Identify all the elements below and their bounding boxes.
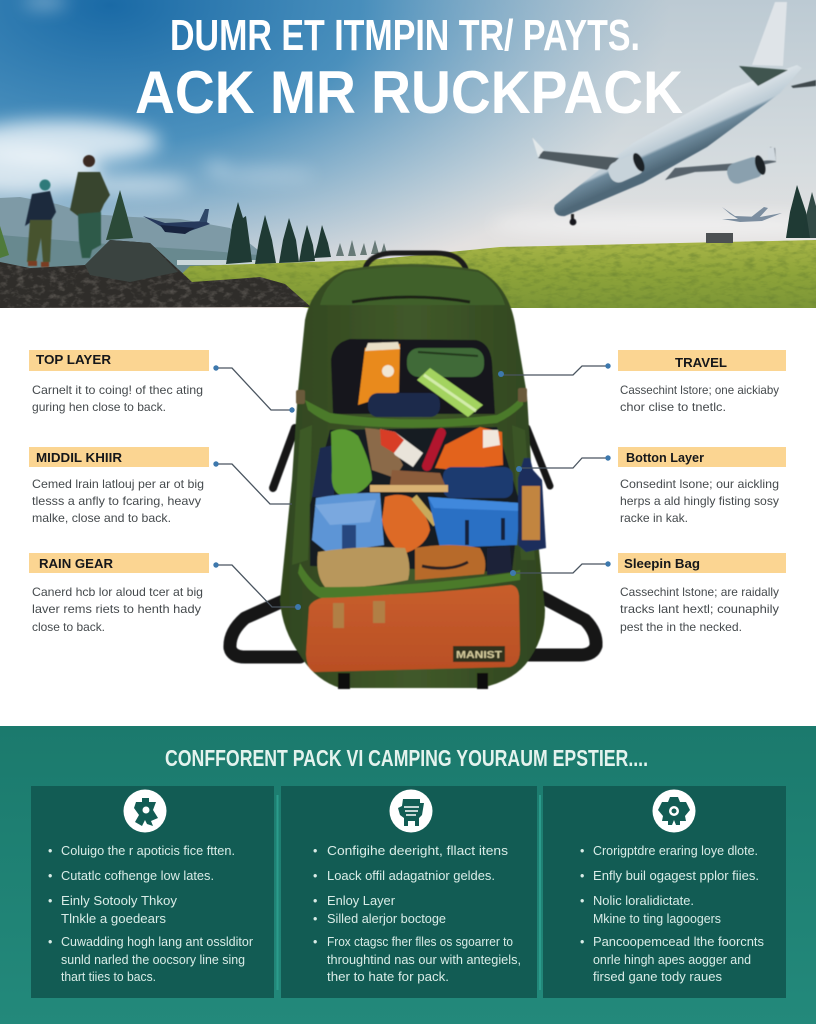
shoulder straps (230, 428, 596, 657)
icon: gear pack (124, 790, 166, 832)
label: middle layer (29, 447, 209, 525)
bullet text: Enfly buil ogagest pplor fiies. (593, 869, 759, 883)
bullet text: Mkine to ting lagoogers (593, 912, 721, 926)
hiker with helmet (25, 180, 56, 267)
bullet text (313, 844, 521, 984)
right engine (726, 154, 766, 184)
water bottle (518, 458, 546, 552)
label: bottom layer: Botton Layer (626, 450, 704, 465)
orange lower pocket (306, 585, 520, 672)
side panel highlights (292, 425, 312, 565)
far plane on the right (722, 207, 782, 222)
large airliner (532, 2, 816, 225)
sky (0, 0, 816, 308)
brand patch (453, 646, 505, 662)
tail fin (752, 2, 787, 66)
bullet text: Cutatlc cofhenge low lates. (61, 869, 214, 883)
label: middle layer: Cemed lrain latlouj per ar ot big (32, 477, 204, 491)
bullet text: • (48, 894, 52, 908)
bullet text: • (580, 935, 584, 949)
lower green strap (298, 563, 520, 598)
side buckles (296, 388, 527, 404)
label: travel (618, 350, 786, 414)
connector lines and dots (213, 363, 611, 610)
bullet text: Nolic loralidictate. (593, 894, 694, 908)
label: sleeping bag: Sleepin Bag (624, 556, 700, 571)
label: top layer (29, 350, 209, 414)
section heading: CONFFORENT PACK VI CAMPING YOURAUM EPSTIER.... (165, 745, 648, 771)
label: middle layer: tlesss a anfly to fcaring, heavy (32, 494, 201, 508)
label: rain gear (29, 553, 209, 634)
orange can (358, 342, 400, 405)
label: sleeping bag (618, 553, 786, 634)
clouds (0, 0, 816, 237)
bullet text: • (580, 894, 584, 908)
label: rain gear: close to back. (32, 620, 105, 634)
side panel right (512, 425, 535, 560)
small distant plane (143, 209, 210, 234)
label: middle layer: malke, close and to back. (32, 511, 171, 525)
label: top layer: TOP LAYER (36, 352, 112, 367)
icon: pack (390, 790, 432, 832)
landing gear (570, 214, 576, 225)
green pouch (407, 348, 484, 377)
bottom feet (338, 673, 488, 689)
brand patch: MANIST (456, 649, 503, 661)
bullet text: Frox ctagsc fher flles os sgoarrer to (327, 935, 513, 949)
red tube (427, 433, 441, 466)
label: sleeping bag: pest the in the necked. (620, 620, 742, 634)
navy side bag (312, 445, 334, 497)
navy zip pouch (443, 467, 513, 498)
bullet text: • (48, 935, 52, 949)
label: sleeping bag: tracks lant hextl; counaphily (620, 602, 779, 616)
panel: card two (281, 786, 537, 998)
bullet text: • (313, 894, 317, 908)
label: bottom layer: racke in kak. (620, 511, 688, 525)
label: travel: Cassechint lstore; one aickiaby (620, 383, 779, 397)
white content panel (0, 308, 816, 726)
upper hood highlight (320, 267, 505, 305)
wooden board (370, 485, 448, 492)
label: rain gear: laver rems riets to henth hady (32, 602, 201, 616)
left engine (608, 152, 645, 184)
brown roll (415, 545, 485, 580)
pocket tabs (333, 601, 385, 628)
green stuff sack (331, 429, 372, 495)
bullet text: Silled alerjor boctoge (327, 912, 446, 926)
bullet text: Tlnkle a goedears (61, 912, 166, 926)
bullet text: Crorigptdre eraring loye dlote. (593, 844, 758, 858)
near wing (538, 150, 620, 170)
label: bottom layer: herps a ald hingly fisting sosy (620, 494, 779, 508)
bullet text: • (580, 844, 584, 858)
panel: card one (31, 786, 274, 998)
hikers (25, 155, 110, 267)
label: rain gear: RAIN GEAR (39, 556, 114, 571)
upper green strap (305, 395, 523, 428)
bullet text: • (313, 869, 317, 883)
label: rain gear: Canerd hcb lor aloud tcer at big (32, 585, 203, 599)
bullet text: ther to hate for pack. (327, 970, 449, 984)
bullet text: Cuwadding hogh lang ant osslditor (61, 935, 253, 949)
fuselage (554, 65, 802, 216)
bullet text: Loack offil adagatnior geldes. (327, 869, 495, 883)
bullet text: • (313, 844, 317, 858)
label: top layer: Carnelt it to coing! of thec ating (32, 383, 203, 397)
label: travel: chor clise to tnetlc. (620, 400, 726, 414)
top handle (364, 253, 467, 272)
red and white bottle (380, 429, 423, 467)
label: bottom layer: Consedint lsone; our aickling (620, 477, 779, 491)
bullet text: Configihe deeright, fllact itens (327, 844, 508, 858)
bullet text: Einly Sotooly Thkoy (61, 894, 178, 908)
orange jacket (435, 427, 503, 470)
distant mountains (0, 197, 258, 273)
bullet text: onrle hingh apes aogger and (593, 953, 751, 967)
blue storage box (428, 497, 520, 548)
bullet text: Pancoopemcead lthe foorcnts (593, 935, 764, 949)
bullet text: Coluigo the r apoticis fice ftten. (61, 844, 235, 858)
rocky foreground (0, 238, 312, 308)
title line one: DUMR ET ITMPIN TR/ PAYTS. (170, 11, 640, 60)
orange bundle (382, 495, 430, 554)
icon: gear (652, 790, 696, 832)
hero photo banner (0, 0, 816, 308)
panel: card three (543, 786, 786, 998)
bullet text (580, 844, 764, 984)
label: middle layer: MIDDIL KHIIR (36, 450, 123, 465)
tan sleeping roll (317, 547, 409, 588)
bullet text: Enloy Layer (327, 894, 395, 908)
teal lower section (0, 726, 816, 1024)
bullet text: throughtind nas our with antegiels, (327, 953, 521, 967)
yellow tube (414, 497, 436, 524)
middle compartment opening (310, 427, 520, 572)
small shed (706, 233, 733, 243)
far wing (665, 147, 776, 180)
bullet text: • (580, 869, 584, 883)
light green package (417, 368, 483, 417)
label: sleeping bag: Cassechint lstone; are raidally (620, 585, 779, 599)
hood zipper (352, 297, 470, 302)
bullet text: • (48, 844, 52, 858)
blue bag (312, 493, 384, 553)
bullet text: sunld narled the oocsory line sing (61, 953, 245, 967)
dark bag (487, 546, 512, 575)
meadow (165, 238, 816, 308)
stabilizer (739, 66, 788, 86)
label: top layer: guring hen close to back. (32, 400, 166, 414)
food on board (390, 470, 445, 485)
top compartment opening (331, 339, 495, 414)
bullet text (48, 844, 253, 984)
bullet text: • (313, 935, 317, 949)
conifer trees (0, 185, 816, 264)
bullet text: firsed gane tody raues (593, 970, 722, 984)
pack body (280, 264, 545, 688)
title line two: ACK MR RUCKPACK (135, 59, 683, 126)
label: travel: TRAVEL (675, 355, 727, 370)
backpack illustration (230, 253, 596, 689)
navy pouch top (368, 393, 440, 417)
standing hiker (70, 155, 110, 258)
bullet text: • (313, 912, 317, 926)
bullet text: • (48, 869, 52, 883)
label: bottom layer (618, 447, 786, 525)
tan sack (365, 428, 403, 478)
bullet text: thart tiies to bacs. (61, 970, 156, 984)
